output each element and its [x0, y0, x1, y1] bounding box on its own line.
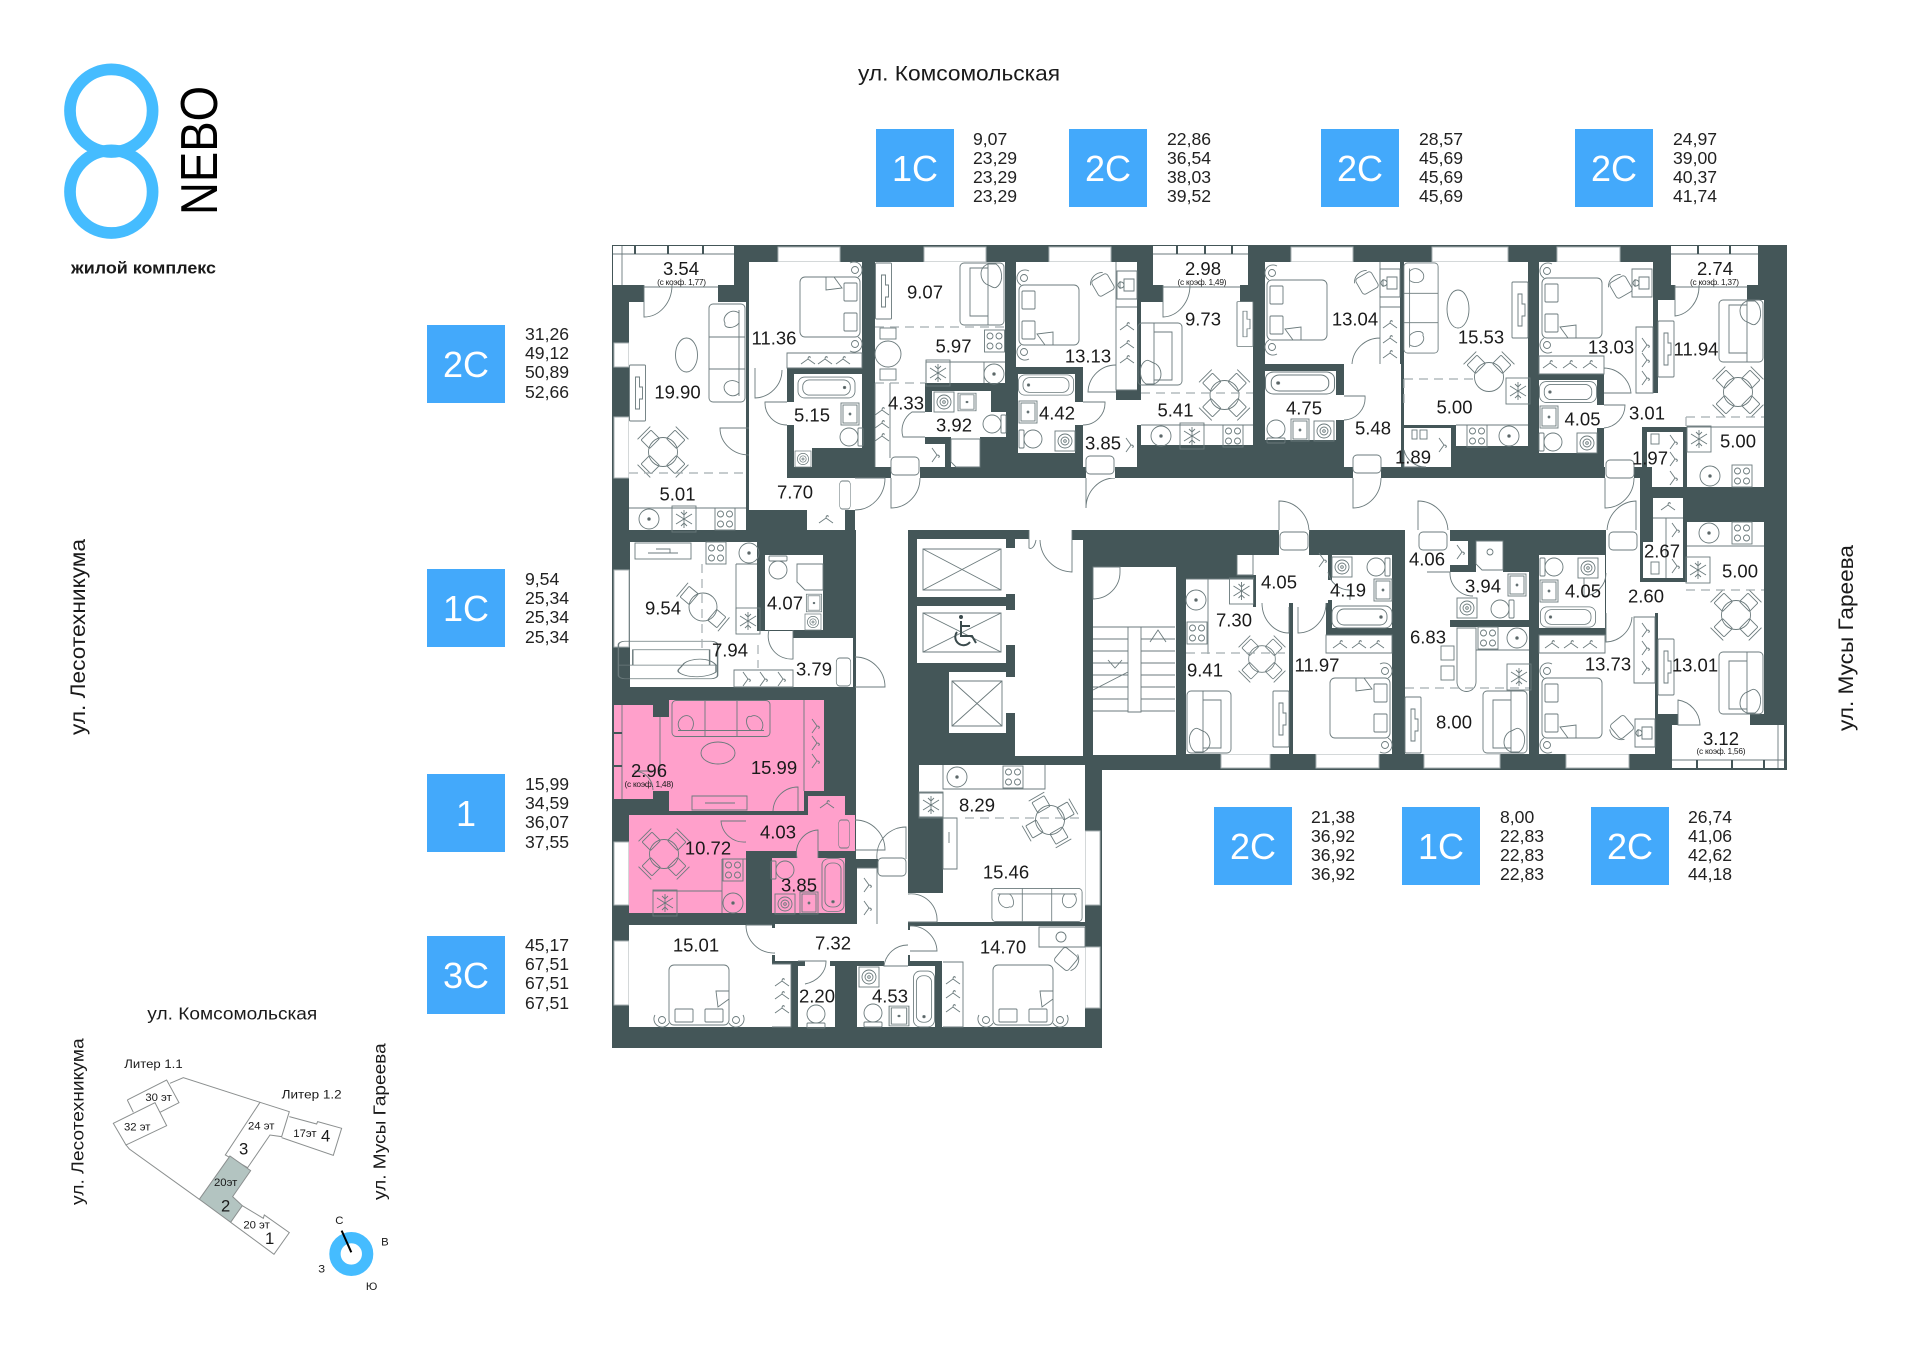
legend 2C top: 38,03	[1167, 167, 1211, 187]
legend 2C bottom: 44,18	[1688, 864, 1732, 884]
legend 2C top: 2С	[1591, 148, 1637, 189]
site mini map	[67, 1003, 389, 1293]
legend 1C left	[427, 569, 569, 647]
apartment 2C: 19.90: 11.36	[752, 328, 796, 348]
windows	[614, 247, 1629, 1008]
legend 2C left: 52,66	[525, 382, 569, 402]
compass: З	[318, 1263, 325, 1275]
apartment 1C: 8.00: 8.00	[1436, 712, 1472, 732]
apartment 2C: 11.94	[1539, 246, 1764, 487]
apartment 2C: 9.73: 9.73	[1185, 308, 1221, 330]
apartment 2C: 19.90: 7.70	[777, 482, 813, 502]
compass: Ю	[366, 1281, 377, 1293]
apartment 1C: 9.07: 4.33	[888, 392, 924, 414]
legend 1C left: 1С	[443, 588, 489, 629]
apartment 1C: 9.54: 3.79	[796, 658, 832, 680]
legend 1 left	[427, 774, 569, 852]
legend 1C bottom	[1402, 807, 1544, 885]
legend 2C bottom: 36,92	[1311, 845, 1355, 865]
apartment 2C: 9.41 / 11.97: 4.05	[1261, 572, 1297, 592]
legend 2C top: 22,86	[1167, 129, 1211, 149]
apartment 2C: 11.94: 2.74	[1697, 258, 1733, 279]
legend 3C left	[427, 935, 569, 1014]
legend 1C bottom: 1С	[1418, 826, 1464, 867]
legend 1C bottom: 22,83	[1500, 864, 1544, 884]
apartment 1C: 8.00: 4.06	[1409, 548, 1445, 570]
selected apartment 1: 15.99 (pink): 4.03	[760, 822, 796, 842]
building walls	[612, 245, 1787, 1048]
apartment 2C: 13.01 / 13.73: (с коэф. 1,56)	[1696, 746, 1746, 756]
lift shaft 3	[949, 672, 1006, 733]
apartment 1C: 8.00	[1405, 530, 1531, 754]
legend 2C top: 2С	[1085, 148, 1131, 189]
apartment 2C: 9.41 / 11.97: 4.19	[1330, 580, 1366, 600]
stairs	[1093, 627, 1175, 712]
legend 2C top	[1575, 129, 1717, 207]
apartment 3C: 15.46: 7.32	[815, 932, 851, 954]
logo: 8 NEBO: NEBO	[171, 86, 229, 215]
apartment 2C: 11.94: 3.01	[1629, 402, 1665, 424]
apartment 3C: 15.46: 2.20	[799, 986, 835, 1006]
mini map labels: 1	[265, 1229, 274, 1248]
selected apartment 1: 15.99 (pink): 3.85	[781, 874, 817, 896]
lift shaft 1	[917, 539, 1006, 597]
legend 1C left: 9,54	[525, 569, 559, 589]
corridor and lift hall	[855, 478, 1640, 924]
selected apartment 1: 15.99 (pink)	[614, 700, 855, 916]
mini map street labels	[67, 1003, 389, 1205]
apartment 2C: 9.73: 2.98	[1185, 258, 1221, 279]
legend 2C left: 50,89	[525, 362, 569, 382]
apartment 2C: 11.94: 5.00	[1720, 430, 1756, 452]
apartment 2C: 13.13	[1016, 262, 1137, 478]
legend 1C top: 9,07	[973, 129, 1007, 149]
apartment 2C: 19.90: 3.54	[663, 258, 699, 279]
apartment 2C: 9.73: 5.41	[1157, 400, 1194, 420]
legend 1 left: 37,55	[525, 832, 569, 852]
apartment 1C: 9.07: 9.07	[907, 282, 943, 302]
apartment 3C: 15.46: 14.70	[980, 936, 1026, 958]
logo: 8 NEBO: жилой комплекс	[70, 260, 216, 278]
mini map labels: 4	[321, 1127, 330, 1146]
legend 1 left: 34,59	[525, 793, 569, 813]
legend 2C bottom	[1214, 807, 1355, 885]
apartment 1C: 9.54: 7.94	[712, 640, 748, 660]
apartment legend: badges and areas	[427, 129, 1732, 1014]
mini map street labels: ул. Мусы Гареева	[369, 1043, 389, 1200]
legend 1C bottom: 22,83	[1500, 826, 1544, 846]
apartment 2C: 15.53: 1.89	[1395, 446, 1431, 468]
apartment 2C: 13.13: 4.42	[1039, 402, 1075, 424]
selected apartment 1: 15.99 (pink): (с коэф. 1,48)	[624, 779, 674, 789]
apartment 3C: 15.46: 4.53	[872, 986, 908, 1006]
apartment 2C: 15.53	[1265, 262, 1530, 478]
apartment 1C: 9.54: 4.07	[767, 592, 803, 614]
legend 2C top: 40,37	[1673, 167, 1717, 187]
mini map labels	[124, 1057, 342, 1248]
apartment 2C: 13.01 / 13.73: 5.00	[1722, 560, 1758, 582]
apartment 2C: 13.01 / 13.73: 13.01	[1672, 654, 1718, 676]
apartment 2C: 11.94: 1.97	[1632, 448, 1668, 468]
compass	[318, 1215, 389, 1293]
legend 3C left: 67,51	[525, 954, 569, 974]
apartment 2C: 13.13: 13.13	[1065, 346, 1111, 366]
legend 3C left: 45,17	[525, 935, 569, 955]
apartment 1C: 9.07	[875, 262, 1006, 478]
street label right: ул. Мусы Гареева	[1835, 545, 1858, 731]
mini map labels: 2	[221, 1196, 230, 1215]
apartment 1C: 8.00: 3.94	[1465, 576, 1501, 596]
legend 1 left: 15,99	[525, 774, 569, 794]
apartment 2C: 19.90: 19.90	[654, 382, 701, 402]
legend 2C top: 45,69	[1419, 167, 1463, 187]
legend 3C left: 67,51	[525, 993, 569, 1013]
legend 2C top	[1321, 129, 1463, 207]
legend 2C bottom: 41,06	[1688, 826, 1732, 846]
apartment 3C: 15.46: 15.01	[673, 934, 719, 956]
apartment 2C: 19.90: (с коэф. 1,77)	[657, 277, 706, 287]
legend 1C top: 1С	[892, 148, 938, 189]
apartment 3C: 15.46: 8.29	[959, 794, 995, 816]
apartment 1C: 9.54	[618, 542, 853, 687]
apartment 3C: 15.46	[629, 765, 1085, 1028]
street label left: ул. Лесотехникума	[67, 539, 90, 735]
legend 2C bottom: 26,74	[1688, 807, 1732, 827]
apartment 2C: 9.41 / 11.97: 11.97	[1295, 654, 1339, 676]
apartment 1C: 9.54: 9.54	[645, 598, 681, 618]
apartment 2C: 13.13: 3.85	[1085, 432, 1121, 454]
selected apartment 1: 15.99 (pink): 10.72	[685, 838, 731, 858]
legend 2C bottom: 21,38	[1311, 807, 1355, 827]
mini map street labels: ул. Комсомольская	[147, 1003, 317, 1023]
apartment 2C: 15.53: 4.75	[1286, 398, 1322, 418]
lift shaft 2 with accessibility icon	[917, 606, 1006, 663]
apartment 1C: 9.07: 5.97	[935, 336, 972, 356]
apartment 2C: 11.94: 4.05	[1564, 408, 1601, 430]
legend 2C bottom: 2С	[1230, 826, 1276, 867]
mini map labels: Литер 1.1	[124, 1057, 183, 1071]
apartment 2C: 9.73: (с коэф. 1,49)	[1178, 277, 1227, 287]
legend 2C bottom: 36,92	[1311, 864, 1355, 884]
mini map labels: 3	[239, 1139, 248, 1158]
legend 2C left: 49,12	[525, 343, 569, 363]
apartment 2C: 13.01 / 13.73: 2.67	[1644, 540, 1680, 562]
selected apartment 1: 15.99 (pink): 15.99	[751, 757, 797, 778]
legend 1 left: 1	[456, 793, 476, 834]
apartment 2C: 9.41 / 11.97: 9.41	[1187, 660, 1223, 680]
compass: С	[335, 1215, 343, 1227]
legend 2C top: 24,97	[1673, 129, 1717, 149]
legend 1C left: 25,34	[525, 588, 569, 608]
apartment 2C: 9.41 / 11.97	[1186, 530, 1392, 754]
legend 2C bottom: 36,92	[1311, 826, 1355, 846]
logo: 8 NEBO	[70, 69, 229, 278]
floor plan	[612, 245, 1787, 1048]
legend 2C left	[427, 324, 569, 403]
legend 3C left: 67,51	[525, 973, 569, 993]
apartment 2C: 11.94: 11.94	[1674, 338, 1718, 360]
legend 1C left: 25,34	[525, 607, 569, 627]
apartment 2C: 15.53: 5.48	[1355, 418, 1391, 438]
legend 2C top: 36,54	[1167, 148, 1211, 168]
legend 2C bottom: 2С	[1607, 826, 1653, 867]
legend 1C bottom: 8,00	[1500, 807, 1534, 827]
apartment 2C: 13.01 / 13.73: 3.12	[1703, 728, 1739, 749]
legend 1C top: 23,29	[973, 167, 1017, 187]
legend 1 left: 36,07	[525, 812, 569, 832]
legend 1C bottom: 22,83	[1500, 845, 1544, 865]
apartment 2C: 13.01 / 13.73	[1539, 498, 1784, 768]
legend 3C left: 3С	[443, 955, 489, 996]
legend 2C top: 2С	[1337, 148, 1383, 189]
legend 2C left: 31,26	[525, 324, 569, 344]
apartment 2C: 11.94: 13.03	[1588, 336, 1634, 358]
compass: В	[381, 1237, 389, 1249]
apartment 2C: 9.41 / 11.97: 7.30	[1216, 610, 1252, 630]
apartment 2C: 15.53: 13.04	[1332, 308, 1378, 330]
street label top: ул. Комсомольская	[858, 62, 1060, 86]
apartment 1C: 8.00: 6.83	[1410, 626, 1446, 648]
mini map labels: Литер 1.2	[282, 1088, 342, 1102]
legend 2C bottom	[1591, 807, 1732, 885]
selected apartment 1: 15.99 (pink): 2.96	[631, 760, 667, 781]
legend 2C bottom: 42,62	[1688, 845, 1732, 865]
legend 2C top	[1069, 129, 1211, 207]
legend 1C top	[876, 129, 1017, 207]
legend 1C left: 25,34	[525, 627, 569, 647]
mini map labels: 24 эт	[248, 1120, 274, 1132]
apartment 2C: 13.01 / 13.73: 13.73	[1585, 654, 1631, 674]
mini map labels: 32 эт	[124, 1121, 150, 1133]
legend 2C top: 41,74	[1673, 186, 1717, 206]
apartment 2C: 19.90	[613, 246, 863, 532]
apartment 2C: 13.01 / 13.73: 4.05	[1565, 580, 1601, 602]
legend 1C top: 23,29	[973, 148, 1017, 168]
mini map labels: 30 эт	[145, 1092, 172, 1104]
legend 2C top: 39,00	[1673, 148, 1717, 168]
apartment 2C: 11.94: (с коэф. 1,37)	[1690, 277, 1739, 287]
legend 2C top: 28,57	[1419, 129, 1463, 149]
apartment 2C: 15.53: 15.53	[1458, 326, 1504, 348]
apartment 3C: 15.46: 15.46	[983, 862, 1029, 882]
mini map labels: 17эт	[293, 1128, 317, 1140]
mini map labels: 20эт	[214, 1177, 237, 1189]
legend 2C top: 39,52	[1167, 186, 1211, 206]
legend 1C top: 23,29	[973, 186, 1017, 206]
apartment 2C: 15.53: 5.00	[1436, 396, 1473, 418]
legend 2C left: 2С	[443, 344, 489, 385]
mini map buildings	[113, 1078, 342, 1254]
legend 2C top: 45,69	[1419, 186, 1463, 206]
apartment 2C: 19.90: 5.15	[794, 404, 830, 426]
apartment 2C: 13.01 / 13.73: 2.60	[1628, 586, 1664, 606]
apartment 1C: 9.07: 3.92	[936, 414, 972, 436]
mini map street labels: ул. Лесотехникума	[67, 1038, 87, 1205]
mini map labels: 20 эт	[243, 1220, 270, 1232]
legend 2C top: 45,69	[1419, 148, 1463, 168]
apartment 2C: 9.73	[1116, 246, 1253, 449]
apartment 2C: 19.90: 5.01	[659, 484, 696, 504]
